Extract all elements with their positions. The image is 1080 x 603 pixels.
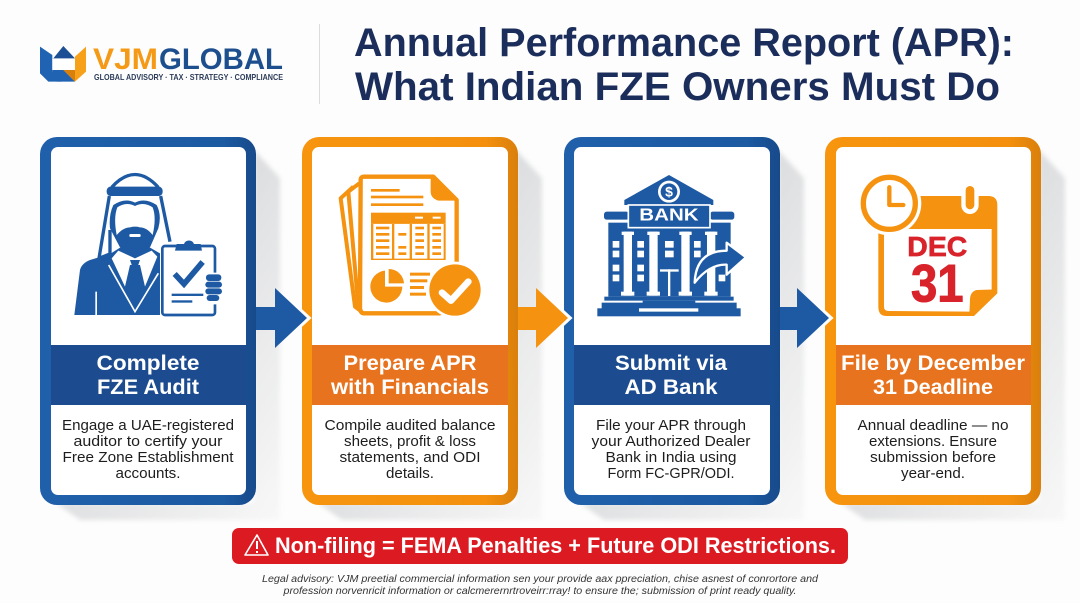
step description: details. (386, 465, 434, 482)
step heading: with Financials (330, 376, 489, 399)
step heading: File by December (841, 352, 1025, 375)
step heading (836, 345, 1031, 405)
step description: File your APR through (596, 417, 746, 434)
step description (62, 417, 234, 482)
card inner (836, 147, 1031, 495)
panel: step 2 prepare APR (302, 137, 518, 505)
step heading: 31 Deadline (873, 376, 993, 399)
step heading: FZE Audit (97, 376, 199, 399)
icon: warning triangle (245, 535, 268, 555)
logo: VJM Global (40, 43, 283, 82)
icon: calendar with clock: 31 (911, 255, 964, 314)
legal advisory text: Legal advisory: VJM preetial commercial information sen your provide aax ppreciation, chise asnest of conrortore and (262, 573, 819, 585)
step heading (574, 345, 770, 405)
logo wordmark GLOBAL: GLOBAL (159, 43, 283, 76)
card inner (51, 147, 246, 495)
step description: extensions. Ensure (869, 433, 997, 450)
step heading: AD Bank (624, 376, 718, 399)
icon: logo mark (40, 46, 86, 82)
step description: Annual deadline — no (858, 417, 1008, 434)
title (354, 21, 1014, 109)
step description: accounts. (116, 465, 180, 482)
icon: auditor with clipboard (74, 174, 223, 315)
arrow: step 2 to 3 (518, 288, 570, 348)
step heading: Submit via (615, 352, 727, 375)
title: Annual Performance Report (APR): (354, 21, 1014, 65)
logo tagline: GLOBAL ADVISORY · TAX · STRATEGY · COMPLIANCE (94, 72, 283, 82)
card frame (564, 137, 780, 505)
legal advisory text: profession norvenricit information or calcmerernrtroveirr:rray! to ensure the; submission of print ready quality. (282, 585, 796, 597)
step description (324, 417, 496, 482)
card frame (825, 137, 1041, 505)
card frame (40, 137, 256, 505)
card frame (302, 137, 518, 505)
icon: calendar with clock (857, 171, 997, 316)
step description: Free Zone Establishment (62, 449, 234, 466)
panel: step 4 file by December 31 (825, 137, 1041, 505)
logo wordmark VJM: VJM (93, 43, 158, 76)
panel: step 3 submit via AD bank (564, 137, 780, 505)
step description: your Authorized Dealer (592, 433, 750, 450)
step description: Compile audited balance (324, 417, 496, 434)
step description: Bank in India using (606, 449, 736, 466)
step heading (312, 345, 508, 405)
step description: Form FC-GPR/ODI. (608, 465, 734, 482)
step description: year-end. (901, 465, 965, 482)
legal advisory text (262, 573, 819, 597)
step description: sheets, profit & loss (344, 433, 476, 450)
icon: calendar with clock: DEC (907, 231, 967, 262)
step heading: Prepare APR (344, 352, 476, 375)
step description: submission before (870, 449, 996, 466)
icon: bank building: BANK (639, 205, 699, 225)
card inner (312, 147, 508, 495)
icon: bank building: $ (665, 184, 673, 200)
step description: statements, and ODI (340, 449, 480, 466)
icon: financial documents (341, 175, 483, 318)
step description: auditor to certify your (74, 433, 223, 450)
card shadows (56, 150, 1065, 520)
card inner (574, 147, 770, 495)
arrow: step 3 to 4 (780, 288, 831, 348)
panel: step 1 complete FZE audit (40, 137, 256, 505)
arrow: step 1 to 2 (256, 288, 309, 348)
warning text: Non-filing = FEMA Penalties + Future ODI Restrictions. (275, 533, 836, 558)
icon: bank building (597, 175, 746, 316)
title: What Indian FZE Owners Must Do (355, 65, 1000, 109)
callout: non-filing warning (232, 528, 848, 564)
step description (592, 417, 750, 482)
step heading: Complete (96, 352, 200, 375)
step description: Engage a UAE-registered (62, 417, 234, 434)
step heading (51, 345, 246, 405)
step description (858, 417, 1008, 482)
